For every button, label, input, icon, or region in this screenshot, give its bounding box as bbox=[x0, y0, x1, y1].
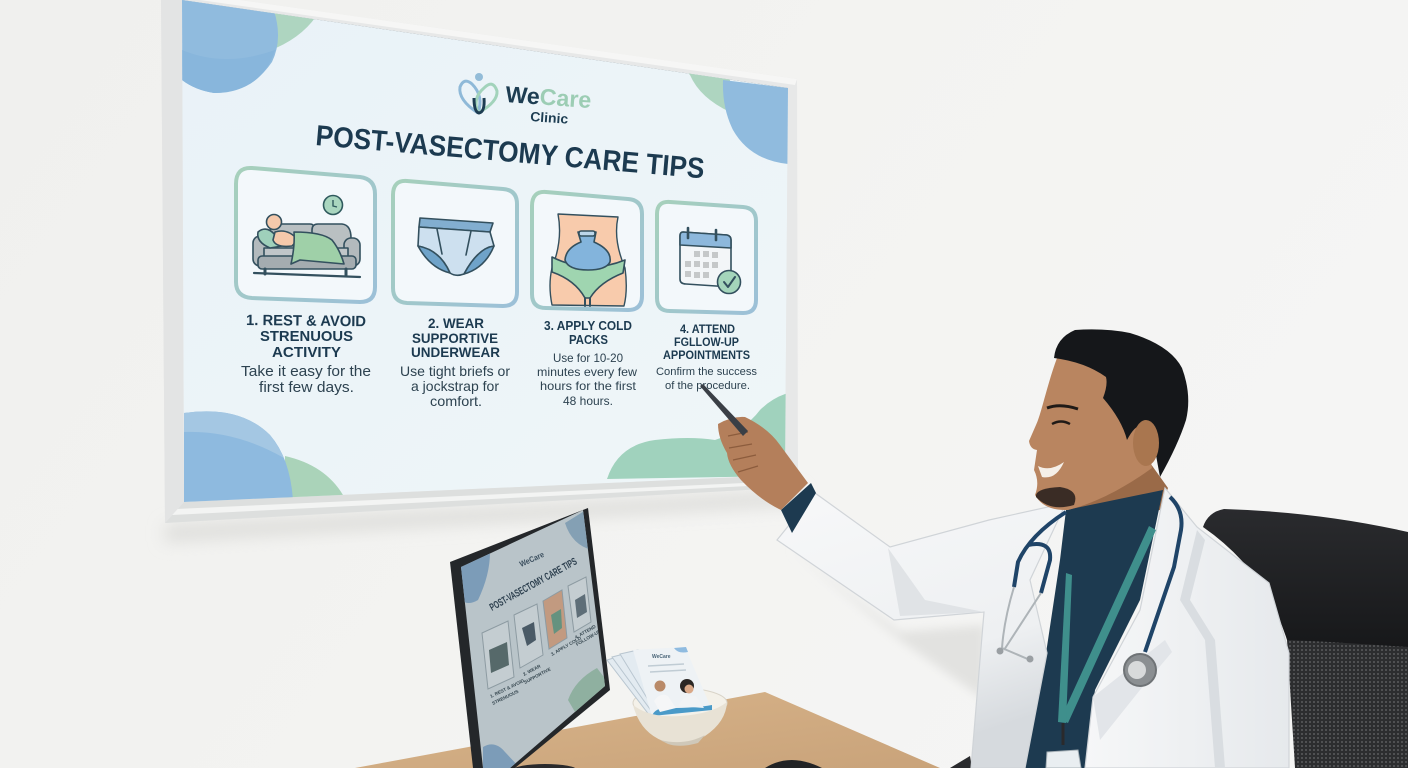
step 4 text: APPOINTMENTS bbox=[663, 350, 750, 362]
bowl interior bbox=[633, 688, 727, 718]
decorative blobs: corners bbox=[182, 0, 788, 502]
icon: person on couch bbox=[253, 214, 360, 277]
step 4 text bbox=[656, 324, 757, 392]
wall shadow behind doctor's arm bbox=[790, 548, 985, 700]
facial features bbox=[1036, 406, 1078, 507]
monitor screen contents: FOLLOW-UP bbox=[575, 629, 602, 647]
logo wordmark: WeCare bbox=[505, 81, 592, 113]
step 2 text bbox=[400, 315, 510, 409]
step 2 text: UNDERWEAR bbox=[411, 344, 500, 360]
hand bbox=[718, 417, 808, 510]
ear bbox=[1133, 420, 1159, 466]
monitor bbox=[450, 508, 610, 768]
face bbox=[1029, 358, 1152, 510]
step 4 text: of the procedure. bbox=[665, 380, 750, 392]
stethoscope bbox=[996, 497, 1182, 686]
front pamphlet: WeCare bbox=[652, 654, 671, 660]
logo mark: heart bbox=[460, 73, 497, 113]
pen bbox=[700, 384, 748, 436]
icon: ice pack on body bbox=[550, 214, 626, 306]
neck bbox=[1070, 460, 1168, 525]
pamphlet stack bbox=[607, 650, 668, 716]
mouse bbox=[765, 760, 822, 768]
monitor screen contents bbox=[461, 510, 610, 768]
step 3 text bbox=[537, 319, 637, 408]
step 2 text: a jockstrap for bbox=[411, 378, 499, 394]
step 2 text: 2. WEAR bbox=[428, 315, 484, 331]
step 2 text: SUPPORTIVE bbox=[412, 330, 498, 346]
step 2 text: Use tight briefs or bbox=[400, 363, 510, 379]
step 2 text: comfort. bbox=[430, 393, 482, 409]
chair bbox=[950, 509, 1408, 768]
step 1 text: STRENUOUS bbox=[260, 328, 353, 345]
shirt cuff bbox=[781, 483, 816, 533]
step 3 text: 3. APPLY COLD bbox=[544, 319, 632, 333]
icon: clock bbox=[324, 196, 342, 214]
monitor screen contents: SUPPORTIVE bbox=[523, 667, 552, 685]
card 1: rest bbox=[236, 168, 375, 302]
step 4 text: Confirm the success bbox=[656, 366, 757, 378]
wall poster frame bbox=[161, 0, 798, 523]
step 1 text bbox=[241, 312, 371, 396]
step 1 text: 1. REST & AVOID bbox=[246, 312, 366, 330]
step 1 text: Take it easy for the bbox=[241, 363, 371, 380]
monitor screen contents: 3. APPLY COLD bbox=[550, 635, 583, 657]
doctor bbox=[700, 329, 1289, 768]
poster bbox=[182, 0, 788, 502]
bowl body bbox=[633, 702, 727, 743]
step 3 text: minutes every few bbox=[537, 365, 637, 379]
bowl with pamphlets bbox=[607, 647, 727, 746]
step 3 text: PACKS bbox=[569, 333, 608, 347]
step 3 text: 48 hours. bbox=[563, 394, 613, 408]
icon: briefs bbox=[418, 218, 494, 275]
monitor stand bbox=[513, 764, 577, 768]
title: POST-VASECTOMY CARE TIPS bbox=[314, 120, 706, 185]
monitor screen contents: 1. REST & AVOID bbox=[489, 678, 526, 699]
monitor screen contents: STRENUOUS bbox=[491, 689, 519, 706]
shadow under the frame bbox=[165, 490, 800, 542]
lanyard bbox=[1046, 526, 1156, 768]
step 4 text: 4. ATTEND bbox=[680, 324, 735, 336]
logo: WeCare Clinic bbox=[460, 73, 592, 127]
hair bbox=[1054, 329, 1188, 477]
icon: calendar with check bbox=[680, 228, 740, 294]
step 1 text: ACTIVITY bbox=[272, 344, 341, 361]
desk bbox=[355, 692, 940, 768]
step 4 text: FGLLOW-UP bbox=[674, 337, 739, 349]
shirt bbox=[1025, 490, 1163, 768]
step 3 text: hours for the first bbox=[540, 379, 637, 393]
logo: WeCare Clinic: Clinic bbox=[530, 109, 569, 127]
lab coat bbox=[777, 493, 1066, 768]
step 3 text: Use for 10-20 bbox=[553, 351, 623, 365]
monitor screen contents: 4. ATTEND bbox=[574, 624, 597, 640]
monitor screen contents: POST-VASECTOMY CARE TIPS bbox=[488, 556, 579, 614]
monitor screen contents: 2. WEAR bbox=[522, 663, 542, 677]
monitor screen contents: WeCare bbox=[518, 550, 546, 569]
card 3: cold pack bbox=[532, 192, 642, 310]
card 4: calendar bbox=[657, 202, 756, 313]
card 2: underwear bbox=[393, 181, 517, 306]
step 1 text: first few days. bbox=[259, 379, 354, 396]
